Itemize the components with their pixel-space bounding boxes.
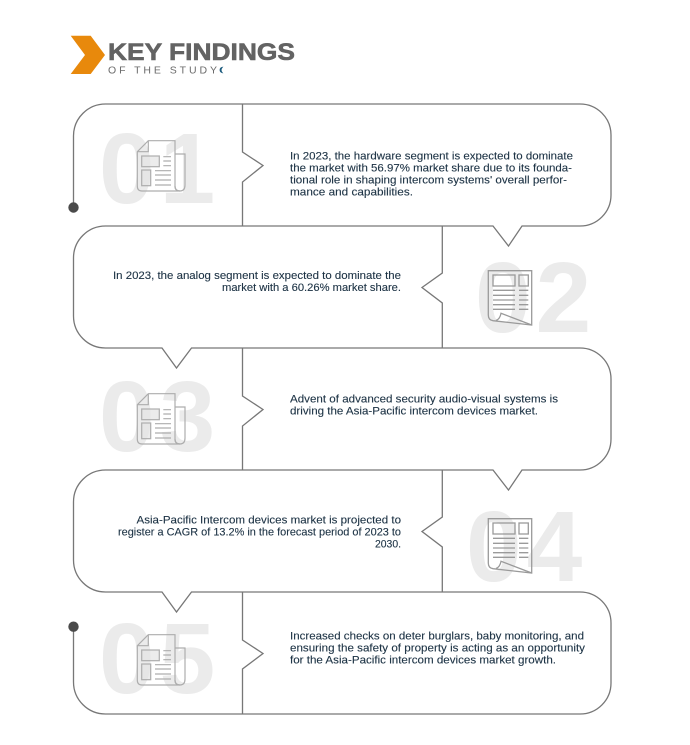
panel outline 02	[74, 226, 580, 368]
subheading: of the study: OF THE STUDY	[108, 64, 217, 76]
icon: newspaper 05	[137, 635, 185, 685]
panel: finding 04	[74, 470, 587, 612]
icon: newspaper 04	[488, 519, 532, 573]
text: finding 01: In 2023, the hardware segment is expected to dominate	[290, 150, 573, 162]
text: finding 04	[118, 514, 401, 550]
panel: finding 03	[99, 348, 611, 490]
text: finding 05: ensuring the safety of property is acting as an opportunity	[290, 642, 586, 654]
text: finding 03	[290, 393, 559, 417]
panel outline 04	[74, 470, 580, 612]
text: finding 02: market with a 60.26% market share.	[222, 282, 401, 294]
panel outline 01	[74, 104, 611, 246]
text: finding 01: the market with 56.97% market share due to its founda-	[290, 162, 572, 174]
divider with notch 02	[422, 226, 442, 348]
icon: newspaper 02	[488, 271, 532, 325]
panel: finding 02	[74, 226, 596, 368]
icon: orange chevron	[71, 36, 105, 74]
text: finding 05: for the Asia-Pacific intercom devices market growth.	[290, 654, 556, 666]
panel outline 03	[106, 348, 611, 490]
text: finding 04: 2030.	[375, 538, 401, 550]
text: finding 01: tional role in shaping intercom systems' overall perfor-	[290, 174, 567, 186]
icon: newspaper 01	[137, 141, 185, 191]
text: finding 02	[113, 270, 401, 294]
text: finding 05	[290, 630, 586, 666]
text: finding 04: register a CAGR of 13.2% in the forecast period of 2023 to	[118, 526, 401, 538]
text: finding 03: Advent of advanced security audio-visual systems is	[290, 393, 559, 405]
icon: small blue half dot	[220, 68, 222, 72]
number 01: 01	[99, 113, 220, 225]
timeline dot top	[68, 202, 79, 213]
title block	[71, 36, 295, 76]
panel outline 05	[74, 592, 611, 714]
panel: finding 01	[68, 104, 611, 246]
text: finding 01	[290, 150, 573, 199]
number 05: 05	[99, 603, 220, 715]
text: finding 03: driving the Asia-Pacific intercom devices market.	[290, 405, 538, 417]
text: finding 05: Increased checks on deter burglars, baby monitoring, and	[290, 630, 584, 642]
text: finding 04: Asia-Pacific Intercom devices market is projected to	[136, 514, 401, 526]
number 04: 04	[466, 491, 587, 603]
text: finding 01: mance and capabilities.	[290, 187, 413, 199]
number 03: 03	[99, 361, 220, 473]
timeline dot bottom	[68, 622, 79, 632]
heading: key findings: KEY FINDINGS	[108, 39, 295, 66]
number 02: 02	[475, 242, 596, 354]
divider with notch 03	[242, 348, 263, 470]
panel: finding 05	[68, 592, 611, 715]
divider with notch 04	[422, 470, 442, 592]
text: finding 02: In 2023, the analog segment is expected to dominate the	[113, 270, 401, 282]
icon: newspaper 03	[137, 394, 185, 444]
divider with notch 01	[242, 104, 263, 226]
divider with notch 05	[242, 592, 263, 714]
